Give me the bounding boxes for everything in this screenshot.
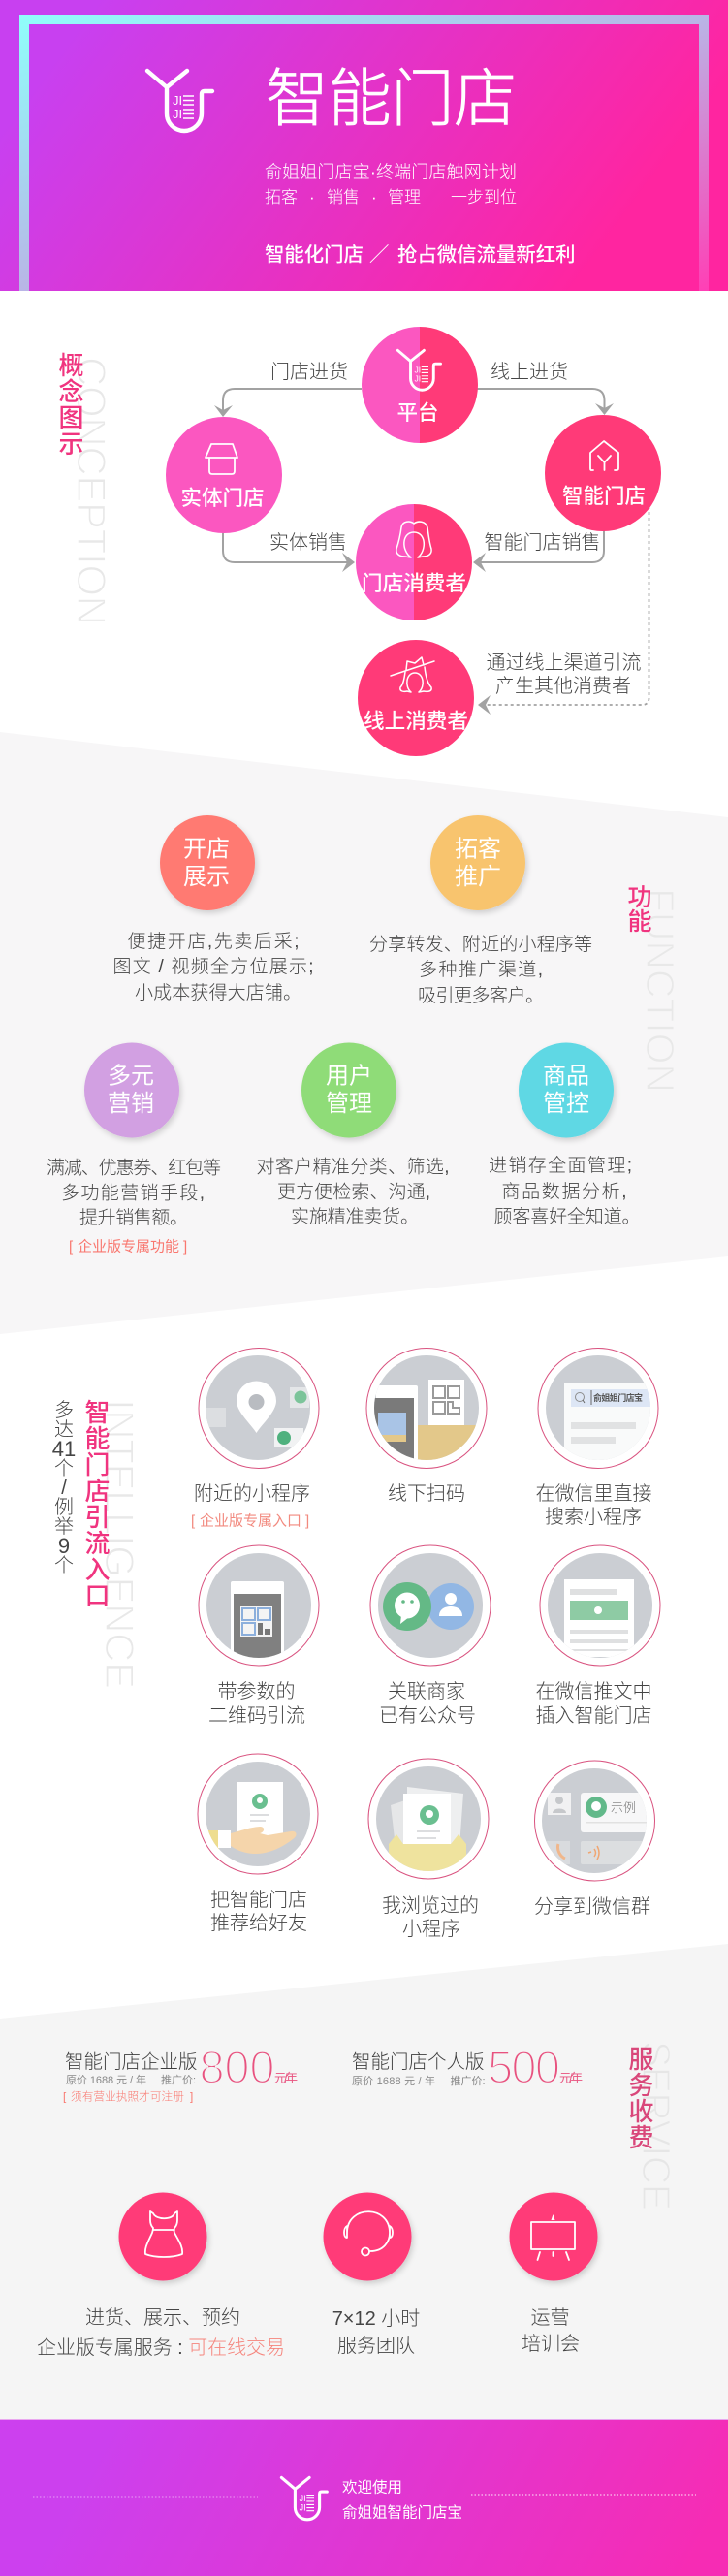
- panel: service fees: [37, 2041, 679, 2359]
- footer text: 俞姐姐智能门店宝: [342, 2503, 462, 2521]
- entrance: linked account: 已有公众号: [379, 1704, 476, 1727]
- entrance: parameter qr: 二维码引流: [208, 1704, 305, 1727]
- subheading: count: 多: [54, 1399, 74, 1421]
- subheading: count: 举: [54, 1515, 74, 1538]
- feature: marketing: 多元: [108, 1063, 154, 1090]
- feature: customers: [369, 815, 592, 1006]
- feature: customers: 多种推广渠道,: [419, 959, 543, 980]
- node: store consumer: 门店消费者: [362, 572, 466, 595]
- node: physical store: [166, 417, 282, 533]
- service: goods: 进货、展示、预约: [85, 2306, 240, 2329]
- feature: open store: 小成本获得大店铺。: [135, 982, 301, 1003]
- entrance: article insert: 插入智能门店: [535, 1704, 651, 1727]
- icon: person hat: [391, 657, 434, 692]
- entrance: linked account: [370, 1545, 491, 1727]
- price: personal: 原价 1688 元 / 年: [352, 2074, 435, 2087]
- title: 智能门店: [266, 63, 517, 134]
- feature: marketing: 多功能营销手段,: [61, 1183, 205, 1204]
- arrow labels: 门店进货: [270, 361, 348, 383]
- price: personal: 推广价:: [450, 2074, 486, 2087]
- license note: [: [63, 2090, 67, 2104]
- price: enterprise: 800: [200, 2042, 275, 2092]
- entrance: share group: [534, 1761, 655, 1918]
- panel: service background: [0, 1944, 728, 2419]
- panel: function background: [0, 732, 728, 1334]
- entrance: recommend: 把智能门店: [210, 1889, 307, 1911]
- feature: customers: 拓客: [455, 836, 501, 863]
- subheading: count: 个: [54, 1554, 74, 1576]
- subtitle: 销售: [327, 188, 360, 207]
- price: personal: [352, 2042, 583, 2092]
- entrance: scan offline: [366, 1348, 487, 1505]
- arrow labels: 智能门店销售: [485, 531, 601, 554]
- entrance: share group: 示例: [611, 1800, 636, 1815]
- panel: header: [0, 0, 728, 291]
- panel: functions: [47, 815, 682, 1255]
- icon: house: [590, 441, 618, 470]
- node: online consumer: 线上消费者: [364, 710, 468, 733]
- service: training: 培训会: [522, 2333, 580, 2355]
- feature: marketing: 满减、优惠券、红包等: [47, 1158, 221, 1179]
- subheading: count: 9: [58, 1534, 70, 1558]
- icon: footer logo: JI: [300, 2494, 306, 2503]
- subheading: count: 例: [54, 1496, 74, 1518]
- icon: logo: JI: [173, 93, 182, 108]
- service: training: 运营: [531, 2306, 570, 2329]
- feature: user management: 实施精准卖货。: [291, 1206, 419, 1227]
- watermark: INTELLIGENCE: INTELLIGENCE: [97, 1399, 142, 1689]
- slogan: 抢占微信流量新红利: [397, 244, 576, 266]
- entrance: article insert: [535, 1545, 660, 1727]
- icon: person hair: [396, 522, 431, 557]
- panel: entrances: [52, 1348, 660, 1940]
- feature: open store: 开店: [183, 836, 230, 863]
- entrance: share group: 分享到微信群: [534, 1895, 650, 1918]
- entrance: browsed: [368, 1759, 489, 1940]
- subtitle: [265, 163, 517, 207]
- feature: goods management: 管控: [543, 1091, 589, 1117]
- node: platform: [362, 327, 478, 443]
- feature: user management: 管理: [326, 1091, 372, 1117]
- service: goods: 企业版专属服务 : 可在线交易: [37, 2337, 285, 2359]
- enterprise tag: ]: [305, 1512, 309, 1530]
- subheading: count: [52, 1399, 76, 1576]
- entrance: nearby: 附近的小程序: [194, 1482, 310, 1505]
- node: online consumer: [358, 640, 474, 756]
- feature: goods management: 商品: [543, 1063, 589, 1090]
- heading: function: 功能: [624, 884, 651, 933]
- enterprise tag: 企业版专属功能: [78, 1237, 179, 1255]
- icon: headset: [344, 2211, 393, 2251]
- feature: goods management: 商品数据分析,: [502, 1181, 626, 1202]
- entrance: browsed: 我浏览过的: [382, 1894, 479, 1917]
- subheading: count: 达: [54, 1418, 74, 1441]
- price: personal: 元/年: [559, 2071, 583, 2084]
- service: team: 服务团队: [337, 2335, 415, 2357]
- panel: concept diagram: [55, 327, 661, 756]
- feature: goods management: 进销存全面管理;: [489, 1155, 632, 1176]
- subtitle: 管理: [388, 188, 421, 207]
- feature: marketing: 营销: [108, 1091, 154, 1117]
- service: goods: [37, 2193, 285, 2359]
- arrow labels: [269, 361, 642, 697]
- price: enterprise: 推广价:: [161, 2073, 196, 2086]
- price: personal: 智能门店个人版: [352, 2051, 485, 2073]
- icon: logo: [147, 71, 212, 131]
- icon: shop: [206, 444, 237, 474]
- icon: platform logo: [397, 350, 441, 390]
- service: team: [324, 2193, 420, 2357]
- feature: user management: 用户: [326, 1063, 372, 1090]
- slogan: ／: [369, 244, 389, 266]
- price: enterprise: 元/年: [274, 2071, 298, 2084]
- feature: user management: 更方便检索、沟通,: [277, 1181, 430, 1202]
- feature: goods management: 顾客喜好全知道。: [494, 1206, 640, 1227]
- entrance: scan offline: 线下扫码: [388, 1482, 465, 1505]
- subheading: count: 个: [54, 1457, 74, 1479]
- subtitle: ·: [371, 188, 377, 207]
- subheading: count: /: [61, 1478, 67, 1499]
- price: enterprise: 智能门店企业版: [65, 2051, 198, 2073]
- entrance: parameter qr: [199, 1545, 319, 1727]
- enterprise tag: ]: [183, 1239, 187, 1255]
- node: smart store: 智能门店: [562, 485, 646, 508]
- watermark: CONCEPTION: CONCEPTION: [69, 357, 114, 625]
- heading: service: 服务收费: [625, 2046, 654, 2150]
- node: store consumer: [356, 504, 472, 620]
- panel: footer: [0, 2419, 728, 2576]
- feature: open store: [112, 815, 314, 1003]
- entrance: recommend: 推荐给好友: [210, 1912, 307, 1934]
- icon: platform logo: JI: [414, 374, 421, 384]
- entrance: wechat search: 在微信里直接: [535, 1482, 651, 1505]
- price: enterprise: [63, 2042, 298, 2104]
- icon: logo: JI: [173, 107, 182, 121]
- feature: goods management: [489, 1043, 640, 1227]
- heading: concept: 概念图示: [55, 352, 84, 457]
- feature: open store: 便捷开店,先卖后采;: [128, 931, 299, 952]
- entrance: wechat search: [535, 1348, 658, 1528]
- slogan: 智能化门店: [265, 244, 364, 266]
- feature: open store: 图文 / 视频全方位展示;: [112, 956, 314, 977]
- arrow labels: 线上进货: [491, 361, 568, 383]
- feature: customers: 推广: [455, 864, 501, 890]
- feature: user management: [256, 1043, 450, 1227]
- node: platform: 平台: [396, 401, 439, 425]
- enterprise tag: [: [69, 1239, 74, 1255]
- price: enterprise: 原价 1688 元 / 年: [66, 2073, 146, 2086]
- node: smart store: [545, 415, 661, 531]
- watermark: FUNCTION: FUNCTION: [638, 888, 682, 1093]
- feature: open store: 展示: [183, 864, 230, 890]
- entrance: linked account: 关联商家: [388, 1680, 465, 1702]
- footer text: 欢迎使用: [342, 2478, 402, 2496]
- entrance: wechat search: 搜索小程序: [545, 1506, 642, 1528]
- entrance: parameter qr: 带参数的: [217, 1680, 295, 1702]
- heading: entrances: 智能门店引流入口: [81, 1399, 111, 1608]
- feature: marketing: 提升销售额。: [79, 1207, 188, 1228]
- entrance: browsed: 小程序: [402, 1918, 460, 1940]
- feature: marketing: [47, 1043, 221, 1255]
- feature: customers: 分享转发、附近的小程序等: [369, 934, 592, 955]
- license note: ]: [190, 2090, 193, 2104]
- node: physical store: 实体门店: [180, 487, 265, 510]
- subtitle: 拓客: [265, 188, 298, 207]
- arrow labels: 实体销售: [269, 531, 347, 554]
- arrow labels: 通过线上渠道引流: [487, 652, 642, 674]
- feature: customers: 吸引更多客户。: [418, 985, 544, 1006]
- entrance: article insert: 在微信推文中: [535, 1680, 651, 1702]
- price: personal: 500: [488, 2042, 560, 2092]
- arrow labels: 产生其他消费者: [495, 675, 631, 697]
- footer text: [342, 2478, 462, 2521]
- icon: dress: [145, 2211, 182, 2257]
- icon: platform logo: JI: [414, 365, 421, 374]
- icon: easel: [531, 2214, 575, 2260]
- entrance: nearby: [191, 1348, 319, 1530]
- header frame: [24, 19, 704, 291]
- feature: user management: 对客户精准分类、筛选,: [256, 1156, 450, 1177]
- entrance: recommend: [198, 1754, 318, 1934]
- enterprise tag: 企业版专属入口: [200, 1512, 301, 1530]
- license note: 须有营业执照才可注册: [71, 2090, 184, 2104]
- arrows: [214, 389, 649, 715]
- icon: footer logo: [281, 2477, 327, 2520]
- subheading: count: 41: [52, 1437, 76, 1461]
- enterprise tag: [: [191, 1512, 196, 1530]
- subtitle: 俞姐姐门店宝·终端门店触网计划: [265, 163, 517, 182]
- subtitle: ·: [309, 188, 315, 207]
- subtitle: 一步到位: [451, 188, 517, 207]
- entrance: wechat search: 俞姐姐门店宝: [593, 1392, 643, 1403]
- icon: footer logo: JI: [300, 2503, 306, 2513]
- service: team: 7×12 小时: [332, 2307, 420, 2330]
- service: training: [510, 2193, 597, 2355]
- watermark: SERVICE: SERVICE: [634, 2041, 679, 2210]
